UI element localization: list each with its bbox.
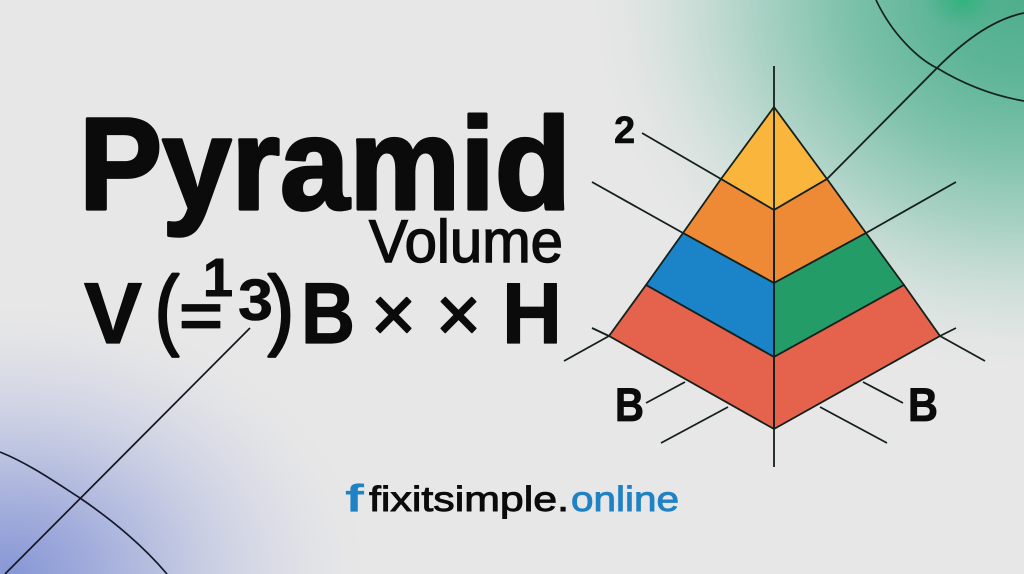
- guide lines around the pyramid: [564, 13, 1024, 467]
- label: 2: 2: [614, 110, 635, 152]
- formula: 1: [203, 248, 233, 308]
- decorative curve: bottom left arc: [0, 452, 167, 574]
- subtitle: Volume: [369, 208, 563, 275]
- formula: V: [84, 266, 142, 362]
- layer: yellow apex: [721, 107, 827, 210]
- centre edge: [773, 107, 775, 429]
- label: B left: B: [615, 378, 644, 431]
- website footer: [346, 478, 679, 519]
- formula: 3: [238, 268, 273, 333]
- website name: fixitsimple.: [369, 480, 569, 519]
- formula: (: [155, 258, 179, 357]
- layer: blue left: [646, 233, 774, 357]
- label: B right: B: [908, 378, 938, 431]
- layer: orange right: [774, 179, 866, 283]
- formula: ×: [436, 270, 481, 358]
- layer: red left base: [609, 285, 774, 429]
- formula: ): [268, 258, 294, 357]
- icon: blue f: f: [346, 478, 364, 519]
- formula: H: [502, 266, 562, 362]
- website domain: online: [571, 480, 679, 519]
- pointer line from formula to bottom left corner: [5, 328, 250, 574]
- layer: orange left: [683, 179, 774, 283]
- layer: red right base: [774, 285, 940, 429]
- layer: green right: [774, 233, 904, 357]
- formula: ×: [371, 270, 416, 358]
- formula: =: [179, 282, 223, 351]
- title: Pyramid: [79, 90, 571, 237]
- formula: B: [301, 266, 355, 362]
- pyramid diagram: [564, 13, 1024, 467]
- decorative curve: top right arc: [876, 0, 1024, 101]
- formula: [84, 248, 562, 362]
